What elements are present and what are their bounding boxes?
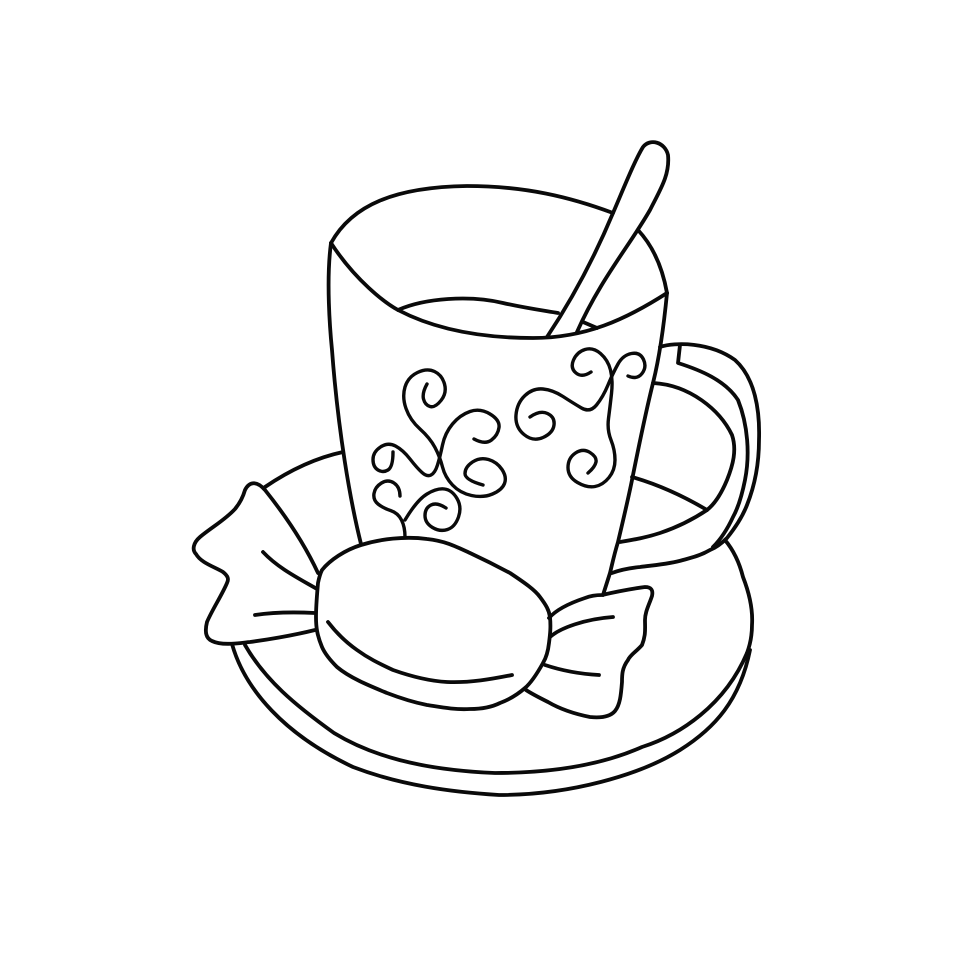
- candy highlight: [328, 622, 512, 682]
- cup handle: [612, 344, 759, 573]
- candy: [194, 483, 652, 717]
- cup swirl ornaments: [373, 349, 645, 537]
- candy right wrapper wing: [526, 587, 652, 717]
- candy left wrapper wing: [194, 483, 318, 644]
- candy body: [316, 538, 550, 709]
- cup body: [329, 186, 667, 595]
- saucer: [232, 452, 752, 795]
- spoon: [547, 142, 668, 337]
